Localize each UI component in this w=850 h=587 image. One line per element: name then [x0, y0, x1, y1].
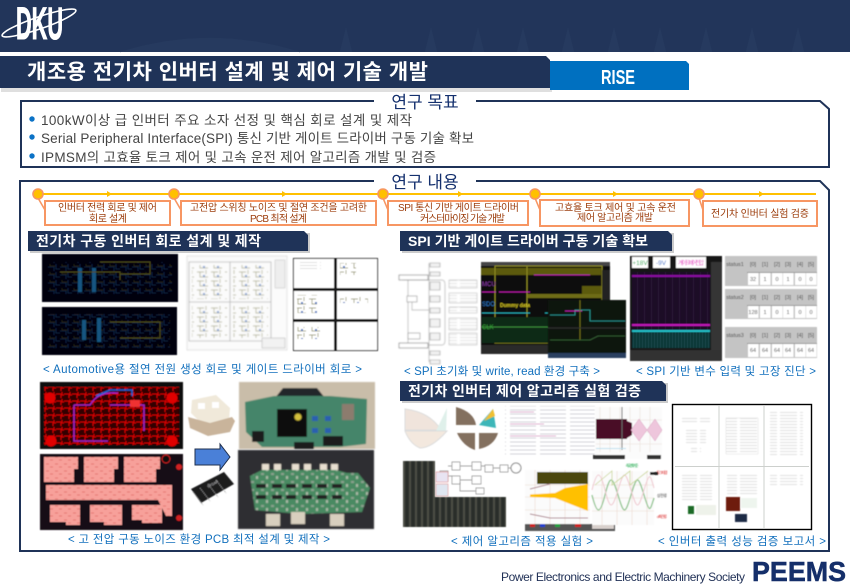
waveform notes [626, 463, 668, 519]
step 4: 제어 알고리즘 개발 [577, 212, 653, 224]
step 3 [388, 201, 528, 225]
table: status3: [1] [762, 333, 769, 339]
image: driver chip [191, 472, 234, 505]
RISE tab: RISE [601, 67, 635, 89]
table: status3 [725, 327, 817, 358]
image: gate driver layout 1 [42, 254, 178, 302]
subheading: inverter circuit: 전기차 구동 인버터 회로 설계 및 제작 [36, 233, 261, 249]
panel: research content [20, 173, 829, 551]
image: red PCB layout [40, 382, 183, 449]
subheading: inverter circuit [28, 231, 310, 253]
panel: research goals [21, 93, 829, 167]
footer society name: Power Electronics and Electric Machinery Society [501, 570, 745, 584]
image: schematic page grid [293, 258, 378, 351]
table: status1: 1 [763, 277, 767, 283]
heading: research goals: 연구 목표 [391, 93, 459, 112]
caption: SPI diagnosis: < SPI 기반 변수 입력 및 고장 진단 > [636, 365, 816, 378]
step 2: PCB 최적 설계 [250, 213, 307, 225]
RISE tab [550, 61, 689, 90]
step 1: 인버터 전력 회로 및 제어 [58, 202, 157, 214]
table: status1: [1] [762, 262, 769, 268]
image: oscilloscope fault diagnosis: 게이트 제어 전압 [678, 259, 704, 267]
chart: sine current waveform [592, 463, 668, 529]
image: oscilloscope zoom capture [548, 300, 626, 358]
step 1: 회로 설계 [89, 213, 127, 225]
scope labels [482, 282, 530, 331]
table: status1: status1 [726, 262, 744, 268]
table: status3: 64 [797, 348, 803, 354]
table: status1 [725, 256, 817, 286]
image: schematic sheet [187, 256, 287, 350]
table: status1: 1 [786, 277, 790, 283]
report page contents [682, 410, 803, 522]
table: status3: [0] [750, 333, 757, 339]
table: status3: [2] [774, 333, 781, 339]
table: status3: 64 [785, 348, 791, 354]
image: inverter performance report [672, 404, 812, 530]
diagram: control block diagram [436, 462, 521, 496]
scope labels: MCU [482, 282, 496, 288]
table: status1: [5] [808, 262, 815, 268]
title bar: 개조용 전기차 인버터 설계 및 제어 기술 개발 [27, 61, 428, 84]
table: status1: [4] [797, 262, 804, 268]
photo: control board [239, 382, 375, 449]
image: pink PCB layout [40, 454, 183, 530]
table: status1: [0] [750, 262, 757, 268]
step 3: 커스터마이징 기술 개발 [420, 213, 505, 225]
goal bullets: IPMSM의 고효율 토크 제어 및 고속 운전 제어 알고리즘 개발 및 검증 [41, 150, 436, 165]
caption: control experiment: < 제어 알고리즘 적용 실험 > [451, 534, 593, 548]
table: status1: 0 [809, 277, 813, 283]
caption: PCB: < 고 전압 구동 노이즈 환경 PCB 최적 설계 및 제작 > [68, 532, 330, 546]
table: status2: [1] [762, 295, 769, 301]
subheading: control algorithm: 전기차 인버터 제어 알고리즘 실험 검증 [408, 383, 641, 399]
waveform notes: 토크 지령 [656, 470, 668, 475]
table: status2: 0 [775, 310, 779, 316]
image: oscilloscope SPI capture [481, 262, 610, 354]
table: status2: status2 [726, 295, 744, 301]
goal bullets [29, 113, 474, 165]
arrow [195, 444, 230, 470]
table: status3: status3 [726, 333, 744, 339]
image: power module [188, 395, 235, 436]
PEEMS logo: PEEMS [752, 556, 846, 587]
image: code listing [505, 406, 595, 456]
scope labels: Dummy data [500, 303, 530, 309]
table: status2: 0 [809, 310, 813, 316]
table: status3: 64 [774, 348, 780, 354]
goal bullets: Serial Peripheral Interface(SPI) 통신 기반 게이트 드라이버 구동 기술 확보 [41, 131, 474, 146]
chart: scope waveforms top [593, 407, 662, 459]
scope labels: SDO [482, 302, 495, 308]
table: status2: 128 [748, 310, 758, 316]
table: status3: 64 [808, 348, 814, 354]
waveform notes: 상전류 [657, 493, 668, 498]
table: status2 [725, 289, 817, 319]
waveform notes: 속도 변화 기준 [626, 463, 639, 468]
table: status1: 32 [750, 277, 756, 283]
step 5 [703, 201, 817, 226]
goal bullets: 100kW이상 급 인버터 주요 소자 선정 및 핵심 회로 설계 및 제작 [41, 113, 412, 128]
image: simulation dark panels [403, 461, 506, 527]
table: status3: [5] [808, 333, 815, 339]
table: status2: 0 [798, 310, 802, 316]
subheading: control algorithm [400, 381, 668, 403]
image: driver chip: STGAP [207, 479, 220, 489]
subheading: SPI [400, 231, 674, 253]
image: oscilloscope fault diagnosis: +18V [632, 260, 648, 267]
step 5: 전기차 인버터 실험 검증 [711, 208, 809, 220]
table: status3: 64 [762, 348, 768, 354]
step 3: SPI 통신 기반 게이트 드라이버 [398, 202, 519, 214]
table: status1: [3] [785, 262, 792, 268]
table: status2: 1 [786, 310, 790, 316]
table: status2: [2] [774, 295, 781, 301]
table: status3: [3] [785, 333, 792, 339]
step 2: 고전압 스위칭 노이즈 및 절연 조건을 고려한 [190, 201, 367, 214]
table: status3: [4] [797, 333, 804, 339]
table: status1: 0 [775, 277, 779, 283]
header band [0, 0, 850, 52]
caption: automotive: < Automotive용 절연 전원 생성 회로 및 게이트 드라이버 회로 > [43, 362, 362, 376]
table: status2: [4] [797, 295, 804, 301]
table: status2: 1 [763, 310, 767, 316]
waveform notes: d축 전류 [657, 514, 668, 519]
step 4 [540, 200, 689, 226]
icon: DKU logo [0, 0, 78, 49]
table: status3: 64 [750, 348, 756, 354]
table: status1: [2] [774, 262, 781, 268]
table: status2: [0] [750, 295, 757, 301]
photo: gate driver board [238, 450, 374, 529]
caption: report: < 인버터 출력 성능 검증 보고서 > [658, 535, 826, 548]
caption: SPI init: < SPI 초기화 및 write, read 환경 구축 > [404, 364, 600, 378]
table: status1: 0 [798, 277, 802, 283]
step 4: 고효율 토크 제어 및 고속 운전 [555, 202, 676, 214]
heading: research content: 연구 내용 [391, 173, 459, 192]
scope labels: CLK [482, 325, 494, 331]
image: SPI flowchart [398, 255, 478, 365]
image: oscilloscope fault diagnosis: -9V [656, 260, 667, 267]
table: status2: [3] [785, 295, 792, 301]
chart: current ramp waveform [525, 470, 615, 531]
image: oscilloscope fault diagnosis [630, 256, 722, 361]
subheading: SPI: SPI 기반 게이트 드라이버 구동 기술 확보 [408, 233, 648, 249]
step 2 [181, 201, 376, 225]
title bar [0, 56, 552, 92]
chart: torque surface plots [405, 407, 498, 450]
step 1 [45, 201, 170, 225]
timeline [33, 189, 816, 210]
image: gate driver layout 2 [42, 307, 177, 355]
table: status2: [5] [808, 295, 815, 301]
